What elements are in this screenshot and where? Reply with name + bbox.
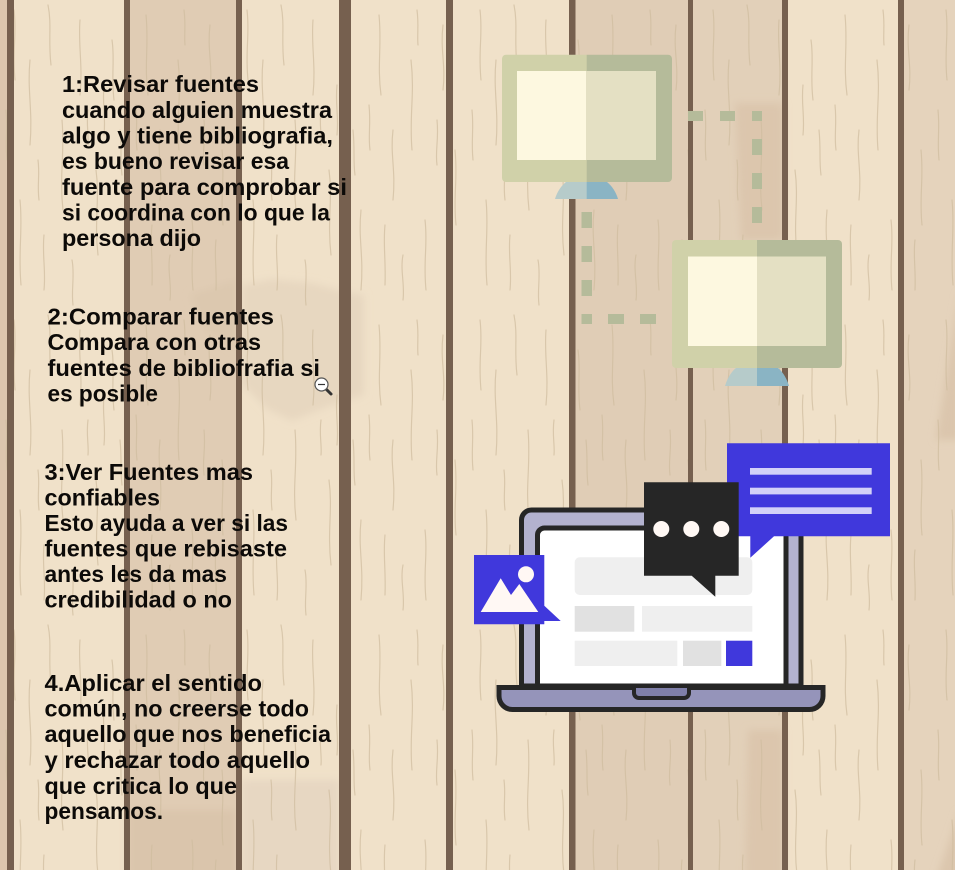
text block 2: comparar fuentes: es posible — [48, 380, 158, 406]
text block 1: revisar fuentes: algo y tiene bibliografia, — [62, 122, 333, 148]
text block 1: revisar fuentes: persona dijo — [62, 225, 201, 251]
text block 1: revisar fuentes: 1:Revisar fuentes — [62, 71, 259, 97]
text block 4: sentido comun — [44, 670, 331, 824]
text block 3: fuentes confiables: confiables — [44, 484, 160, 510]
icon: zoom-out cursor — [315, 378, 331, 394]
laptop lid — [522, 510, 801, 686]
text block 2: comparar fuentes: 2:Comparar fuentes — [48, 304, 274, 330]
text block 2: comparar fuentes — [48, 304, 320, 406]
text block 3: fuentes confiables: antes les da mas — [44, 561, 227, 587]
icon: bottom monitor — [672, 240, 842, 386]
text block 1: revisar fuentes: si coordina con lo que la — [62, 200, 330, 226]
text block 2: comparar fuentes: fuentes de bibliofrafia si — [48, 355, 320, 381]
text block 4: sentido comun: común, no creerse todo — [44, 696, 309, 722]
text block 4: sentido comun: pensamos. — [44, 798, 163, 824]
text block 1: revisar fuentes: fuente para comprobar si — [62, 174, 347, 200]
screen content blocks — [575, 557, 752, 666]
text block 3: fuentes confiables: Esto ayuda a ver si las — [44, 510, 288, 536]
text block 4: sentido comun: aquello que nos beneficia — [44, 721, 331, 747]
text block 1: revisar fuentes — [62, 71, 347, 251]
black speech bubble — [644, 482, 739, 597]
laptop notch — [634, 686, 689, 698]
text block 4: sentido comun: y rechazar todo aquello — [44, 747, 310, 773]
text block 4: sentido comun: 4.Aplicar el sentido — [44, 670, 262, 696]
icon: dotted connector between monitors — [582, 111, 762, 324]
text block 3: fuentes confiables: credibilidad o no — [44, 586, 232, 612]
image speech bubble — [474, 555, 561, 624]
text block 3: fuentes confiables: fuentes que rebisaste — [44, 536, 287, 562]
icon: top monitor — [502, 55, 672, 199]
text block 2: comparar fuentes: Compara con otras — [48, 329, 261, 355]
text block 1: revisar fuentes: cuando alguien muestra — [62, 97, 332, 123]
text block 1: revisar fuentes: es bueno revisar esa — [62, 148, 289, 174]
icon: laptop with chat bubbles — [474, 443, 890, 710]
laptop base — [499, 688, 823, 710]
text block 3: fuentes confiables: 3:Ver Fuentes mas — [44, 459, 253, 485]
text block 4: sentido comun: que critica lo que — [44, 773, 237, 799]
laptop screen — [538, 528, 786, 686]
blue speech bubble — [727, 443, 890, 558]
text block 3: fuentes confiables — [44, 459, 288, 612]
